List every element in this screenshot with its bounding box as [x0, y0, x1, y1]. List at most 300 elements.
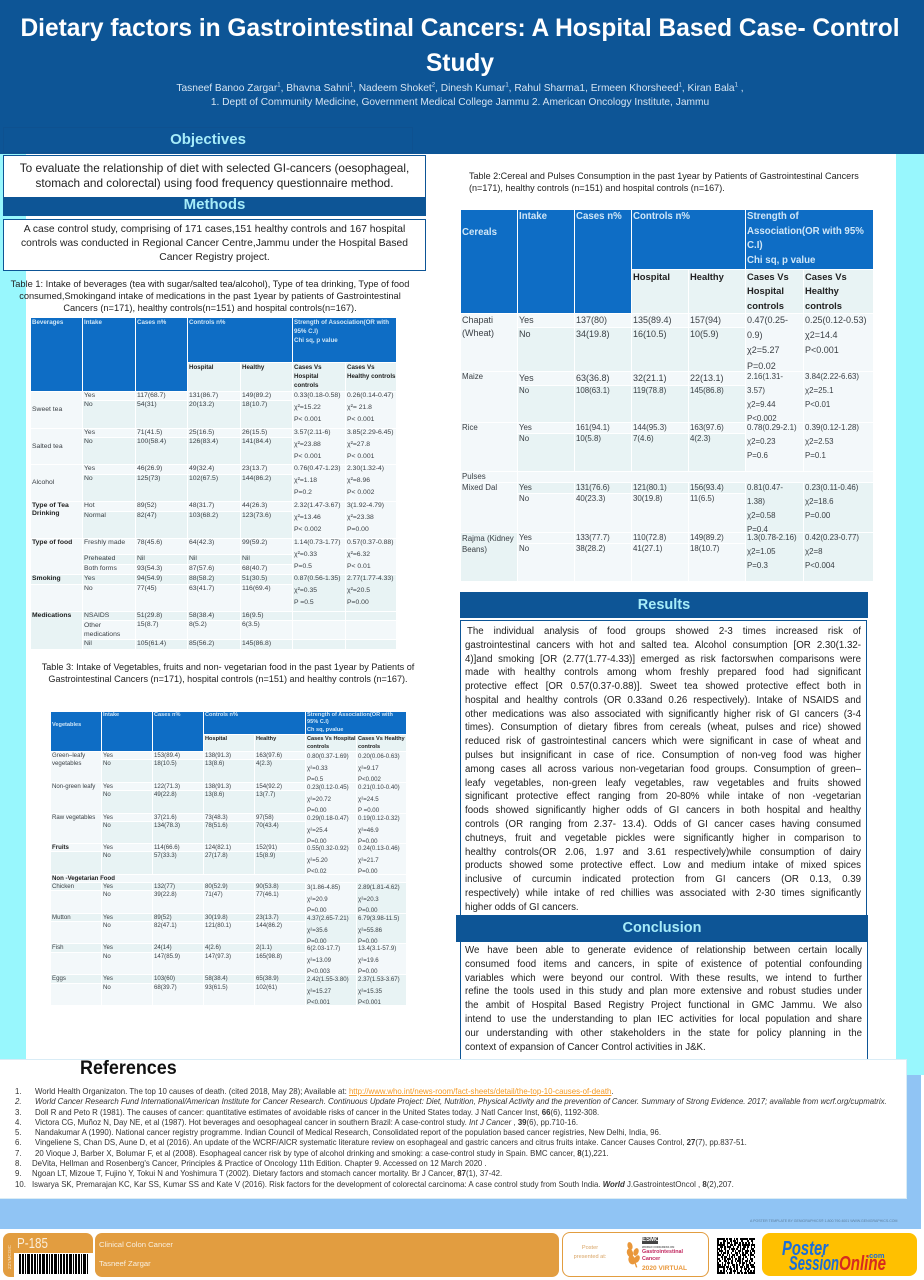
table 1: beverages: Nil — [189, 555, 197, 562]
table 1: beverages: 141(84.4) — [242, 438, 271, 445]
table 1: beverages: 8(5.2) — [189, 621, 207, 628]
table 3: vegetables and non-vegetarian food: 2(1.1) — [256, 944, 272, 951]
table 1: beverages: Yes — [84, 575, 95, 582]
heading: methods — [3, 197, 426, 216]
table 1: beverages: P< 0.001 — [294, 453, 321, 460]
table 2: cereals and pulses: No — [519, 329, 531, 339]
panel: results text: gastrointestinal cancers with hot and salted tea. Alcohol consumption [OR 2.30(1.32- — [465, 640, 861, 651]
table 2: cereals and pulses: 0.78(0.29-2.1) — [747, 423, 797, 432]
table 3: vegetables and non-vegetarian food: Ch sq, pvalue — [307, 727, 343, 733]
reference list: DeVita, Hellman and Rosenberg's Cancer, Principles & Practice of Oncology 11th Edition. Chapter 9. Accessed on 12 March 2020 . — [32, 1159, 487, 1168]
table 3: vegetables and non-vegetarian food: 165(98.8) — [256, 953, 282, 960]
table 1: beverages: Other medications — [84, 622, 120, 638]
reference list: 2. — [15, 1097, 22, 1106]
table 2: cereals and pulses: 108(63.1) — [576, 386, 610, 395]
table 2: cereals and pulses: 2.16(1.31- — [747, 372, 783, 381]
table 3: vegetables and non-vegetarian food: Yes — [103, 883, 113, 890]
table 1: beverages: 85(56.2) — [189, 640, 214, 647]
table 1: beverages: Type of food — [32, 539, 72, 546]
table 3: vegetables and non-vegetarian food: 30(19.8) — [205, 914, 228, 921]
table 2: cereals and pulses: P=0.02 — [747, 361, 776, 371]
table 3: vegetables and non-vegetarian food: 58(38.4) — [205, 975, 228, 982]
presented at label: Poster — [582, 1245, 598, 1251]
table 1: beverages: 16(9.5) — [242, 612, 264, 619]
table 3: vegetables and non-vegetarian food: χ²=5.20 — [307, 856, 328, 864]
table 2: cereals and pulses: P=0.00 — [805, 511, 830, 520]
table 2: cereals and pulses: Mixed Dal — [462, 483, 497, 492]
table 3: vegetables and non-vegetarian food: 4.37(2.65-7.21) — [307, 915, 349, 922]
heading: results: Results — [638, 597, 690, 613]
background: cyan side bands — [0, 154, 924, 1075]
table 2: cereals and pulses: Yes — [519, 315, 534, 325]
table 1: beverages: P< 0.002 — [347, 489, 374, 496]
footer: PosterSessionOnline logo: Poster — [782, 1238, 829, 1260]
table 3: vegetables and non-vegetarian food: Non -Vegetarian Food — [52, 875, 115, 882]
table 1: beverages: Nil — [137, 555, 145, 562]
table 1: beverages — [31, 318, 396, 649]
table 2: cereals and pulses: Yes — [519, 533, 532, 542]
panel: results text: higher odds of GI cancers. — [465, 902, 579, 913]
table 1: beverages: Cases Vs — [294, 364, 322, 371]
table 1: beverages: χ²=0.35 — [294, 587, 317, 594]
panel: methods text: controls was conducted in Regional Cancer Centre,Jammu under the Hospital Based — [21, 238, 408, 249]
panel: conclusion text: variables which were beyond our control. With these results, we intend to further — [465, 973, 862, 984]
table 3: vegetables and non-vegetarian food: 163(97.6) — [256, 752, 282, 759]
congress name: Cancer — [642, 1256, 660, 1262]
table 3: vegetables and non-vegetarian food: 138(91.3) — [205, 783, 231, 790]
title — [20, 14, 900, 76]
table 1: beverages: Both forms — [84, 565, 117, 572]
table 3: vegetables and non-vegetarian food: P=0.5 — [307, 776, 323, 783]
table 1: beverages: 125(73) — [137, 475, 160, 482]
table 2: cereals and pulses: 16(10.5) — [633, 329, 667, 339]
title: Dietary factors in Gastrointestinal Cancers: A Hospital Based Case- Control — [20, 14, 900, 42]
panel: methods text: Cancer Registry project. — [159, 252, 270, 263]
table 2: cereals and pulses: 34(19.8) — [576, 329, 610, 339]
reference list: 7. — [15, 1149, 22, 1158]
table 1: beverages: P=0.2 — [294, 489, 312, 496]
table 3: vegetables and non-vegetarian food: 0.29(0.18-0.47) — [307, 815, 349, 822]
table 3: vegetables and non-vegetarian food: 0.23(0.12-0.45) — [307, 784, 349, 791]
table 1: beverages: 51(30.5) — [242, 575, 267, 582]
table 1: beverages: 95% C.I) — [294, 328, 318, 335]
table 1: beverages: 18(10.7) — [242, 401, 267, 408]
reference list: 6. — [15, 1138, 22, 1147]
table 1: beverages: 63(41.7) — [189, 585, 214, 592]
table 1: beverages: P=0.00 — [347, 599, 369, 606]
table 1: beverages: 123(73.6) — [242, 512, 271, 519]
table 2: cereals and pulses: 38(28.2) — [576, 544, 605, 553]
table 3: vegetables and non-vegetarian food: No — [103, 822, 111, 829]
congress edition: 2020 VIRTUAL — [642, 1265, 687, 1272]
table 1: beverages: 1.14(0.73-1.77) — [294, 539, 340, 546]
table 3: vegetables and non-vegetarian food: χ²=55.86 — [358, 926, 382, 934]
table 2: cereals and pulses: 156(93.4) — [690, 483, 724, 492]
table 3: vegetables and non-vegetarian food — [51, 712, 406, 1006]
table 2: cereals and pulses: P<0.01 — [805, 400, 830, 409]
table 3: vegetables and non-vegetarian food: No — [103, 852, 111, 859]
table 3: vegetables and non-vegetarian food: Eggs — [52, 975, 66, 982]
table 1: beverages: 144(86.2) — [242, 475, 271, 482]
table 3: vegetables and non-vegetarian food: 2.37(1.53-3.67) — [358, 976, 400, 983]
authors and affiliations: 1. Deptt of Community Medicine, Government Medical College Jammu 2. American Oncology Institute, Jammu — [211, 97, 709, 108]
table 2: cereals and pulses: Controls n% — [633, 211, 690, 222]
table 1: beverages: Hot — [84, 502, 95, 509]
table 3: vegetables and non-vegetarian food: 27(17.8) — [205, 852, 228, 859]
barcode — [14, 1253, 93, 1277]
panel: results text: other medications was also associated with significantly higher risk of GI cancers (3-4 — [465, 709, 861, 720]
panel: results text: controls (OR ranging from 2.37- 13.4). Odds of GI cancer cases having consumed — [465, 819, 861, 830]
table 3: vegetables and non-vegetarian food: P<0.001 — [307, 999, 330, 1006]
table 3: vegetables and non-vegetarian food: 147(97.3) — [205, 953, 231, 960]
table 2: cereals and pulses: Cereals — [462, 227, 497, 238]
table 3: vegetables and non-vegetarian food: P=0.00 — [307, 807, 326, 814]
caption: table 2 — [469, 171, 859, 193]
table 2: cereals and pulses: χ2=18.6 — [805, 497, 834, 506]
presented at label: presented at: — [574, 1254, 606, 1260]
table 2: cereals and pulses: 3.57) — [747, 386, 765, 395]
authors and affiliations: Tasneef Banoo Zargar1, Bhavna Sahni1, Nadeem Shoket2, Dinesh Kumar1, Rahul Sharma1, Ermeen Khorsheed1, Kiran Bala1 , — [176, 83, 744, 94]
table 1: beverages: χ²=23.38 — [347, 514, 374, 521]
panel: objectives text: To evaluate the relationship of diet with selected GI-cancers (oesophageal, — [20, 161, 409, 175]
reference list: Doll R and Peto R (1981). The causes of cancer: quantitative estimates of avoidable risks of cancer in the United States today. J Natl Cancer Inst, 66(6), 1192-308. — [35, 1108, 599, 1117]
table 3: vegetables and non-vegetarian food: 80(52.9) — [205, 883, 228, 890]
table 3: vegetables and non-vegetarian food: Yes — [103, 844, 113, 851]
caption: table 1 — [10, 279, 409, 313]
table 2: cereals and pulses: Chi sq, p value — [747, 254, 815, 266]
table 1: beverages: Preheated — [84, 555, 115, 562]
table 3: vegetables and non-vegetarian food: Intake — [103, 712, 119, 718]
table 1: beverages: 117(68.7) — [137, 392, 166, 399]
table 1: beverages: 20(13.2) — [189, 401, 214, 408]
table 3: vegetables and non-vegetarian food: χ²=13.09 — [307, 956, 331, 964]
heading: conclusion: Conclusion — [623, 920, 701, 936]
reference list — [15, 1087, 887, 1189]
table 2: cereals and pulses: χ2=8 — [805, 547, 823, 556]
congress name — [642, 1245, 683, 1262]
table 3: vegetables and non-vegetarian food: 13.4(3.1-57.9) — [358, 945, 396, 952]
table 3: vegetables and non-vegetarian food: P=0.00 — [358, 868, 378, 875]
table 2: cereals and pulses: 149(89.2) — [690, 533, 724, 542]
panel: conclusion text: We have been able to generate evidence of relationship between certain locally — [465, 945, 862, 956]
table 3: vegetables and non-vegetarian food: 77(46.1) — [256, 891, 279, 898]
table 3: vegetables and non-vegetarian food: 73(48.3) — [205, 814, 228, 821]
panel: conclusion text: our understanding with other stakeholders in the state for policy planning in the — [465, 1028, 862, 1039]
table 2: cereals and pulses: P=0.6 — [747, 451, 768, 460]
table 1: beverages: χ²=20.5 — [347, 587, 370, 594]
table 2: cereals and pulses: Cases n% — [576, 211, 622, 222]
table 2: cereals and pulses: Maize — [462, 372, 483, 381]
table 3: vegetables and non-vegetarian food: 71(47) — [205, 891, 223, 898]
table 2: cereals and pulses: Yes — [519, 483, 532, 492]
table 1: beverages: P =0.5 — [294, 599, 314, 606]
table 3: vegetables and non-vegetarian food: Vegetables — [52, 722, 81, 728]
table 3: vegetables and non-vegetarian food: 70(43.4) — [256, 822, 279, 829]
table 1: beverages: 0.76(0.47-1.23) — [294, 465, 340, 472]
panel: results text: hospital and healthy controls (OR 0.33and 0.26 respectively). Intake of NSAIDS and — [465, 695, 861, 706]
table 1: beverages: χ²=6.32 — [347, 551, 370, 558]
panel: conclusion text — [460, 942, 868, 1060]
table 3: vegetables and non-vegetarian food: Mutton — [52, 914, 71, 921]
table 1: beverages: Controls n% — [189, 319, 225, 326]
table 2: cereals and pulses: 110(72.8) — [633, 533, 666, 542]
table 1: beverages: P=0.5 — [294, 563, 312, 570]
table 3: vegetables and non-vegetarian food: 93(61.5) — [205, 984, 228, 991]
table 1: beverages: Nil — [84, 640, 92, 647]
table 1: beverages: 58(38.4) — [189, 612, 214, 619]
table 3: vegetables and non-vegetarian food: 0.55(0.32-0.92) — [307, 845, 349, 852]
table 3: vegetables and non-vegetarian food: 3(1.86-4.85) — [307, 884, 340, 891]
table 2: cereals and pulses: Healthy — [690, 271, 724, 282]
table 1: beverages: P=0.00 — [347, 526, 369, 533]
table 3: vegetables and non-vegetarian food: Yes — [103, 975, 113, 982]
table 3: vegetables and non-vegetarian food: Yes — [103, 783, 113, 790]
table 2: cereals and pulses: Cases Vs Hospital controls — [747, 271, 789, 311]
footer: QR code — [717, 1238, 755, 1274]
table 1: beverages: Medications — [32, 612, 71, 619]
table 3: vegetables and non-vegetarian food: 147(85.9) — [154, 953, 180, 960]
table 3: vegetables and non-vegetarian food: Non-green leafy — [52, 783, 95, 790]
table 1: beverages: Freshly made — [84, 539, 125, 546]
table 1: beverages: 93(54.3) — [137, 565, 162, 572]
table 1: beverages: 102(67.5) — [189, 475, 218, 482]
caption: table 3: Gastrointestinal Cancers (n=171), hospital controls (n=151) and healthy controls (n=167). — [48, 674, 408, 684]
table 1: beverages: Cases Vs — [347, 364, 375, 371]
table 2: cereals and pulses: 18(10.7) — [690, 544, 719, 553]
table 2: cereals and pulses: Strength of — [747, 211, 799, 222]
table 2: cereals and pulses — [461, 210, 873, 581]
table 1: beverages: 126(83.4) — [189, 438, 218, 445]
table 2: cereals and pulses: C.I) — [747, 240, 763, 251]
panel: methods text — [3, 219, 426, 271]
background: lower blue band — [0, 1075, 921, 1229]
table 2: cereals and pulses: 137(80) — [576, 315, 607, 325]
table 1: beverages: 2.77(1.77-4.33) — [347, 575, 393, 582]
table 1: beverages: 145(86.8) — [242, 640, 271, 647]
table 1: beverages: 54(31) — [137, 401, 157, 408]
table 3: vegetables and non-vegetarian food: 0.21(0.10-0.40) — [358, 784, 400, 791]
table 1: beverages: Strength of Association(OR with — [294, 319, 389, 326]
table 2: cereals and pulses: χ2=0.23 — [747, 437, 776, 446]
reference list: Victora CG, Muñoz N, Day NE, et al (1987). Hot beverages and oesophageal cancer in southern Brazil: A case-control study. Int J Cancer , 39(6), pp.710-16. — [35, 1118, 578, 1127]
table 3: vegetables and non-vegetarian food: 13(7.7) — [256, 791, 275, 798]
table 2: cereals and pulses: Rajma (Kidney Beans) — [462, 534, 514, 554]
table 3: vegetables and non-vegetarian food: P=0.00 — [358, 838, 378, 845]
table 3: vegetables and non-vegetarian food: Cases n% — [154, 712, 180, 718]
table 2: cereals and pulses: Rice — [462, 423, 478, 432]
table 2: cereals and pulses: 145(86.8) — [690, 386, 724, 395]
table 1: beverages: Yes — [84, 392, 95, 399]
table 3: vegetables and non-vegetarian food: χ²=20.72 — [307, 796, 331, 802]
table 2: cereals and pulses: χ2=2.53 — [805, 437, 834, 446]
heading: objectives: Objectives — [170, 131, 246, 148]
table 3: vegetables and non-vegetarian food: χ²=15.35 — [358, 988, 382, 994]
table 1: beverages: 94(54.9) — [137, 575, 162, 582]
caption: table 1: Cancers (n=171), healthy controls(n=151) and hospital controls(n=167). — [63, 303, 357, 313]
table 1: beverages: Hospital — [294, 373, 318, 380]
table 2: cereals and pulses: No — [519, 544, 529, 553]
category: Clinical Colon Cancer — [99, 1240, 173, 1249]
table 1: beverages: 51(29.8) — [137, 612, 162, 619]
reference list: 8. — [15, 1159, 22, 1168]
title: Study — [426, 48, 494, 76]
table 1: beverages: 149(89.2) — [242, 392, 271, 399]
table 3: vegetables and non-vegetarian food: P=0.00 — [358, 938, 378, 945]
table 3: vegetables and non-vegetarian food: χ²=9.17 — [358, 764, 379, 772]
table 2: cereals and pulses: P=0.4 — [747, 525, 768, 534]
table 3: vegetables and non-vegetarian food: χ²=20.3 — [358, 896, 379, 902]
table 3: vegetables and non-vegetarian food: χ²=46.9 — [358, 826, 379, 834]
panel: results text: significant protective effect ranging from 20-80% while intake of non -vegetarian — [465, 791, 861, 802]
table 1: beverages: 15(8.7) — [137, 621, 159, 628]
caption: table 2: (n=171), healthy controls (n=151) and hospital controls (n=167). — [469, 183, 725, 193]
table 3: vegetables and non-vegetarian food: Cases Vs Healthy — [358, 736, 405, 742]
table 1: beverages: 103(68.2) — [189, 512, 218, 519]
panel: conclusion text: context of expansion of Cancer Control activities in J&K. — [465, 1042, 706, 1053]
heading: conclusion — [456, 915, 868, 942]
table 3: vegetables and non-vegetarian food: 0.80(0.37-1.69) — [307, 753, 349, 760]
table 2: cereals and pulses: 40(23.3) — [576, 494, 605, 503]
table 3: vegetables and non-vegetarian food: 0.24(0.13-0.46) — [358, 845, 400, 852]
table 3: vegetables and non-vegetarian food: No — [103, 891, 111, 898]
panel: results text: protective effect [OR 0.57(0.37-0.88)]. Sweet tea showed protective effect both in — [465, 681, 861, 692]
table 3: vegetables and non-vegetarian food: Controls n% — [205, 712, 238, 718]
footer: PosterSessionOnline logo — [762, 1233, 917, 1276]
table 3: vegetables and non-vegetarian food: P<0.001 — [358, 999, 381, 1006]
table 1: beverages: χ²= 21.8 — [347, 404, 372, 411]
table 2: cereals and pulses: 22(13.1) — [690, 373, 724, 383]
table 1: beverages: No — [84, 438, 93, 445]
footer: PosterSessionOnline logo: Session — [789, 1253, 839, 1275]
table 2: cereals and pulses: 32(21.1) — [633, 373, 667, 383]
panel: results text: The individual analysis of food groups showed 2-3 times increased risk of — [467, 626, 861, 637]
table 2: cereals and pulses: 0.81(0.47- — [747, 483, 783, 492]
congress name: WORLD CONGRESS ON — [642, 1245, 674, 1249]
table 1: beverages: P< 0.002 — [294, 526, 321, 533]
table 3: vegetables and non-vegetarian food: χ²=19.6 — [358, 956, 379, 964]
table 2: cereals and pulses: Cases Vs Healthy controls — [805, 271, 847, 311]
table 2: cereals and pulses: 0.39(0.12-1.28) — [805, 423, 859, 432]
table 1: beverages: 131(86.7) — [189, 392, 218, 399]
table 1: beverages: 99(59.2) — [242, 539, 267, 546]
table 1: beverages: 3(1.92-4.79) — [347, 502, 384, 509]
table 3: vegetables and non-vegetarian food: 97(58) — [256, 814, 274, 821]
table 3: vegetables and non-vegetarian food: 2.89(1.81-4.62) — [358, 884, 400, 891]
footer: congress logo box — [562, 1232, 709, 1277]
table 2: cereals and pulses: 11(6.5) — [690, 494, 714, 503]
table 3: vegetables and non-vegetarian food: 65(38.9) — [256, 975, 279, 982]
table 2: cereals and pulses: 63(36.8) — [576, 373, 610, 383]
table 1: beverages: 26(15.5) — [242, 429, 267, 436]
table 1: beverages: Sweet tea — [32, 406, 62, 413]
table 2: cereals and pulses: χ2=25.1 — [805, 386, 834, 395]
table 1: beverages: Smoking — [32, 575, 61, 582]
table 1: beverages: 0.57(0.37-0.88) — [347, 539, 393, 546]
heading: references: References — [80, 1057, 177, 1079]
table 3: vegetables and non-vegetarian food: controls — [307, 744, 329, 750]
reference list: Iswarya SK, Premarajan KC, Kar SS, Kumar SS and Kate V (2016). Risk factors for the development of colorectal carcinoma: A case control study from South India. World J.GastrointestOncol , 8(2),207. — [32, 1180, 734, 1189]
table 1: beverages: NSAIDS — [84, 612, 109, 619]
table 1: beverages: Hospital — [189, 364, 213, 371]
table 1: beverages: Normal — [84, 512, 106, 519]
table 3: vegetables and non-vegetarian food: Green–leafy vegetables — [52, 752, 85, 767]
logo: ESMO: ESMO — [642, 1237, 660, 1243]
table 2: cereals and pulses: No — [519, 494, 529, 503]
table 3: vegetables and non-vegetarian food: 154(92.2) — [256, 783, 282, 790]
table 3: vegetables and non-vegetarian food: Fish — [52, 944, 64, 951]
panel: results text: inclusive of curcumin indicated protection from GI cancers (OR 0.13, 0.39 — [465, 874, 861, 885]
table 2: cereals and pulses: 144(95.3) — [633, 423, 667, 432]
table 3: vegetables and non-vegetarian food: 132(77) — [154, 883, 175, 890]
table 2: cereals and pulses: χ2=14.4 — [805, 330, 838, 340]
table 2: cereals and pulses: Chapati (Wheat) — [462, 315, 494, 338]
table 2: cereals and pulses: 157(94) — [690, 315, 721, 325]
panel: references — [0, 1059, 907, 1199]
reference list: 4. — [15, 1118, 22, 1127]
table 1: beverages: Healthy controls — [347, 373, 395, 380]
table 1: beverages: χ²=23.88 — [294, 441, 321, 448]
table 3: vegetables and non-vegetarian food: controls — [358, 744, 380, 750]
panel: results text: foods showed significantly higher odds of GI cancers in both hospital and healthy — [465, 805, 861, 816]
panel: conclusion text: the ambit of Hospital Based Registry Project functional in GMC Jammu. We also — [465, 1000, 862, 1011]
table 1: beverages: χ²=0.33 — [294, 551, 317, 558]
table 3: vegetables and non-vegetarian food: 4(2.3) — [256, 760, 272, 767]
table 2: cereals and pulses: Hospital — [633, 271, 670, 282]
table 3: vegetables and non-vegetarian food: 4(2.6) — [205, 944, 221, 951]
table 3: vegetables and non-vegetarian food: Yes — [103, 814, 113, 821]
table 2: cereals and pulses: Intake — [519, 211, 547, 222]
table 3: vegetables and non-vegetarian food: P =0.00 — [358, 807, 379, 814]
reference list: 5. — [15, 1128, 22, 1137]
table 1: beverages: 23(13.7) — [242, 465, 267, 472]
table 1: beverages: Salted tea — [32, 442, 63, 450]
table 3: vegetables and non-vegetarian food: 102(61) — [256, 984, 277, 991]
table 1: beverages: χ²=1.18 — [294, 477, 317, 484]
table 3: vegetables and non-vegetarian food: 37(21.6) — [154, 814, 177, 821]
table 3: vegetables and non-vegetarian food: Hospital — [205, 736, 227, 742]
panel: results text: times). Consumption of dietary fibres from cereals (wheat, pulses and rice) showed — [465, 722, 861, 733]
footer: PosterSessionOnline logo: .com — [867, 1251, 885, 1260]
table 3: vegetables and non-vegetarian food: 138(91.3) — [205, 752, 231, 759]
table 1: beverages: Yes — [84, 465, 95, 472]
table 1: beverages: controls — [294, 382, 318, 389]
table 1: beverages: Nil — [242, 555, 250, 562]
table 3: vegetables and non-vegetarian food: Yes — [103, 914, 113, 921]
table 3: vegetables and non-vegetarian food: Chicken — [52, 883, 74, 890]
caption: table 1: consumed,Smokingand intake of medications in the past 1year by patients of Gastrointestinal — [19, 291, 401, 301]
table 1: beverages: 3.85(2.29-6.45) — [347, 429, 393, 436]
table 3: vegetables and non-vegetarian food: 95% C.I) — [307, 719, 329, 725]
table 1: beverages: 49(32.4) — [189, 465, 214, 472]
table 1: beverages: 25(16.5) — [189, 429, 214, 436]
table 3: vegetables and non-vegetarian food: No — [103, 760, 111, 767]
table 3: vegetables and non-vegetarian food: P<0.003 — [307, 968, 330, 975]
table 2: cereals and pulses: 7(4.6) — [633, 434, 654, 443]
table 3: vegetables and non-vegetarian food: Healthy — [256, 736, 276, 742]
table 2: cereals and pulses: P=0.3 — [747, 561, 768, 570]
panel: results text: 4)]and smoking [OR (2.77(1.77-4.33)] emerged as risk factorswhen comparisons were — [465, 654, 861, 665]
panel: conclusion text: intend to use the understanding to plan IEC activities for local population and share — [465, 1014, 862, 1025]
table 2: cereals and pulses: 10(5.9) — [690, 329, 719, 339]
panel: results text: leafy vegetables, non-green leafy vegetables, raw vegetables and fruits showed — [465, 778, 861, 789]
footer: PosterSessionOnline logo: Online — [839, 1253, 886, 1275]
reference list: 9. — [15, 1169, 22, 1178]
table 3: vegetables and non-vegetarian food: 57(33.3) — [154, 852, 177, 859]
table 2: cereals and pulses: 0.42(0.23-0.77) — [805, 533, 859, 542]
table 1: beverages: Alcohol — [32, 479, 54, 486]
table 1: beverages: P< 0.001 — [347, 453, 374, 460]
table 3: vegetables and non-vegetarian food: Cases Vs Hospital — [307, 736, 356, 742]
